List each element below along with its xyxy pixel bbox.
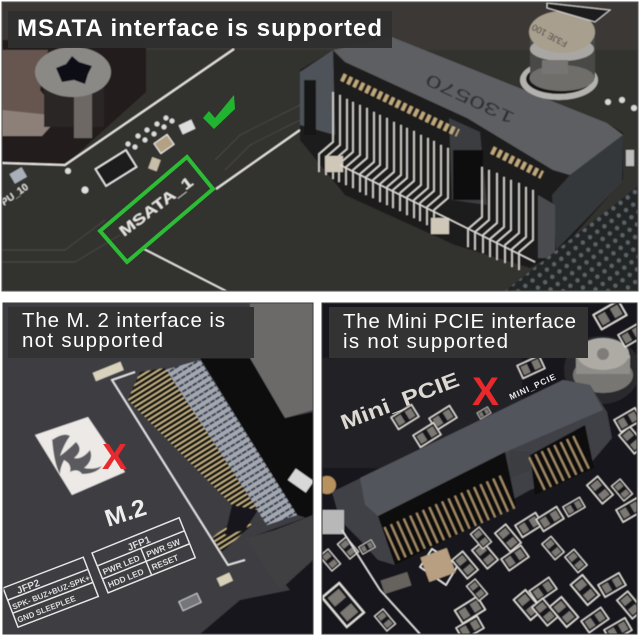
board socket pins bottom right	[505, 186, 638, 291]
heatsink	[250, 303, 313, 418]
pcb label: M.2: M.2	[102, 494, 150, 533]
green highlight box	[100, 157, 213, 262]
gold contacts	[342, 77, 458, 133]
screw	[564, 336, 640, 404]
label bar	[329, 307, 588, 358]
mSATA connector: 130570	[423, 70, 518, 128]
JFP1 table: JFP1	[126, 534, 153, 554]
Mini PCIE connector	[332, 380, 612, 565]
heading: MSATA interface is supported	[17, 15, 382, 42]
icon: green check mark	[203, 95, 235, 129]
pcb label: PU_10: PU_10	[0, 182, 31, 208]
ceramic capacitor	[381, 548, 458, 594]
JFP1 table: PWR SW	[145, 536, 183, 559]
JFP2 table: GND SLEEPLEE	[16, 594, 78, 625]
pcb label: small MINI_PCIE: MINI_PCIE	[508, 371, 557, 402]
resistor left of connector	[322, 475, 345, 535]
label bar	[8, 307, 254, 358]
panel frame: right	[322, 303, 637, 634]
silkscreen lines	[2, 49, 310, 291]
slot silkscreen outline	[112, 372, 245, 565]
label bar	[8, 11, 392, 48]
M.2 slot contacts	[165, 360, 297, 525]
right pin group	[468, 167, 533, 270]
panel: MSATA supported photo	[0, 2, 638, 291]
label text line 1: The M. 2 interface is	[22, 309, 225, 332]
panel: M.2 not supported photo	[3, 303, 314, 634]
top right solder pads	[547, 3, 637, 166]
left pin group	[319, 92, 448, 228]
capacitor	[514, 11, 598, 100]
panel frame: top	[2, 2, 638, 291]
JFP2 table	[3, 557, 98, 627]
panel: Mini PCIE not supported photo	[318, 301, 640, 637]
JFP1 table: HDD LED	[106, 566, 145, 590]
JFP1 table: RESET	[150, 552, 181, 572]
red X mark: X	[102, 436, 127, 477]
JFP1 table: PWR LED	[101, 553, 141, 577]
JFP1 table	[92, 518, 195, 593]
silkscreen traces	[342, 530, 420, 634]
QR-style marking	[35, 417, 125, 495]
panel frame: left	[3, 303, 313, 634]
JFP2 table: SPK- BUZ+BUZ-SPK+	[11, 573, 92, 612]
small components	[9, 116, 195, 194]
label text line 1: The Mini PCIE interface	[343, 310, 576, 333]
pcb label: Mini_PCIE: Mini_PCIE	[338, 368, 462, 435]
black connector shadow	[200, 358, 313, 520]
mSATA connector	[300, 37, 623, 270]
label text line 2: not supported	[22, 329, 163, 352]
M.2 slot pin field	[128, 368, 258, 510]
capacitor: F3JE 100 16V	[514, 13, 569, 49]
JFP2 table: JFP2	[15, 578, 42, 597]
label text line 2: is not supported	[343, 330, 508, 353]
red X mark: X	[472, 370, 499, 414]
solder pads	[320, 301, 640, 637]
pcb label: MSATA_1: MSATA_1	[116, 174, 197, 240]
bottom right black module	[200, 515, 313, 634]
screw mount area	[2, 40, 146, 165]
small resistors right	[93, 362, 314, 611]
